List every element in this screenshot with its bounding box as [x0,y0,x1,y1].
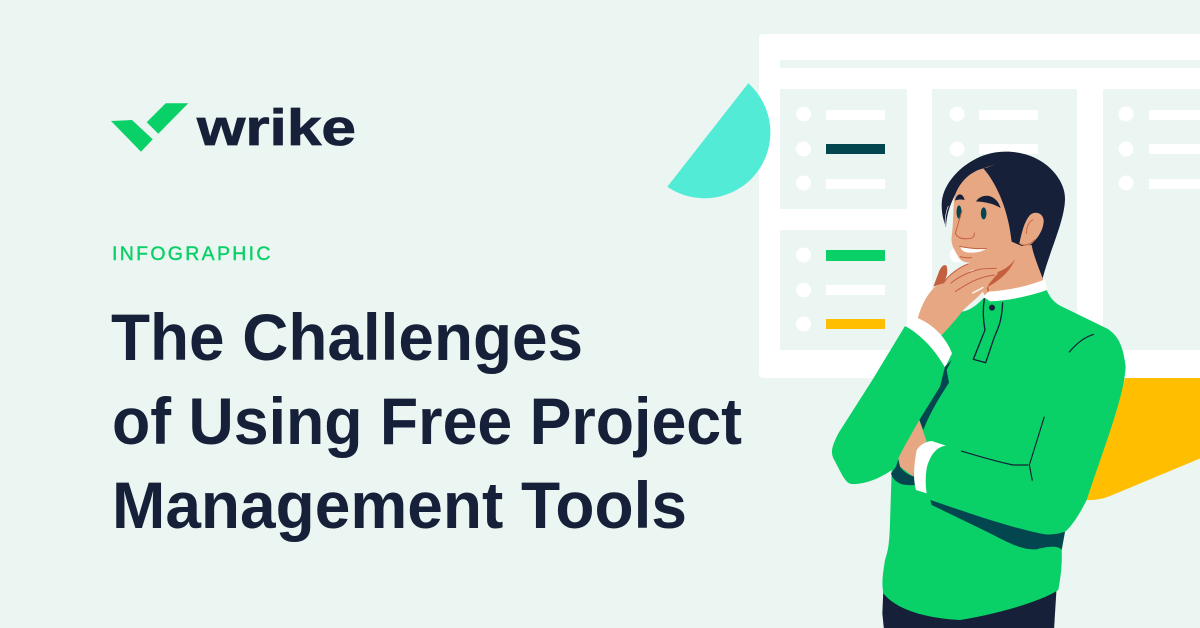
hand on chin [918,261,998,335]
card: right column [1103,89,1200,350]
shape: teal half circle [667,83,770,198]
eyebrow label: INFOGRAPHIC [112,243,270,265]
logo: wrike [111,99,356,156]
jaw shadow [987,259,1015,299]
ring [972,287,983,293]
hair back [942,152,1065,278]
trousers [882,587,1057,628]
sweater [832,290,1126,620]
forearm shadow [930,500,1065,550]
placket [973,298,1003,363]
shoulder crease [1069,334,1094,352]
thumb [933,265,947,287]
mouth [960,247,987,253]
face and neck [951,164,1047,300]
ear [1019,213,1044,246]
button [989,305,995,311]
card: middle column [932,89,1077,350]
title: Management Tools [112,468,687,542]
title: of Using Free Project [112,384,742,458]
ear lines [1019,219,1035,245]
sleeve creases [961,417,1044,481]
collar [983,279,1047,301]
nose [955,211,974,239]
panel: project board [759,34,1200,378]
shirt cuff lower [914,441,946,493]
title [111,300,742,542]
eyes [956,205,961,219]
arm shadow upper [919,360,952,430]
logo wordmark: wrike [196,99,356,156]
title: The Challenges [111,300,583,374]
eyebrows [955,194,1001,208]
shirt cuff upper [905,318,952,367]
card: bottom left task list [780,230,907,350]
icon: wrike check mark [111,103,188,152]
card: top left task list [780,89,907,209]
hair front strand [983,163,1033,242]
second hand [898,420,927,477]
hair fringe highlight [945,206,948,226]
arm shadow lower [891,453,915,485]
finger lines [943,264,997,292]
shape: yellow accent [1085,378,1200,500]
illustration: thinking man [832,152,1126,628]
